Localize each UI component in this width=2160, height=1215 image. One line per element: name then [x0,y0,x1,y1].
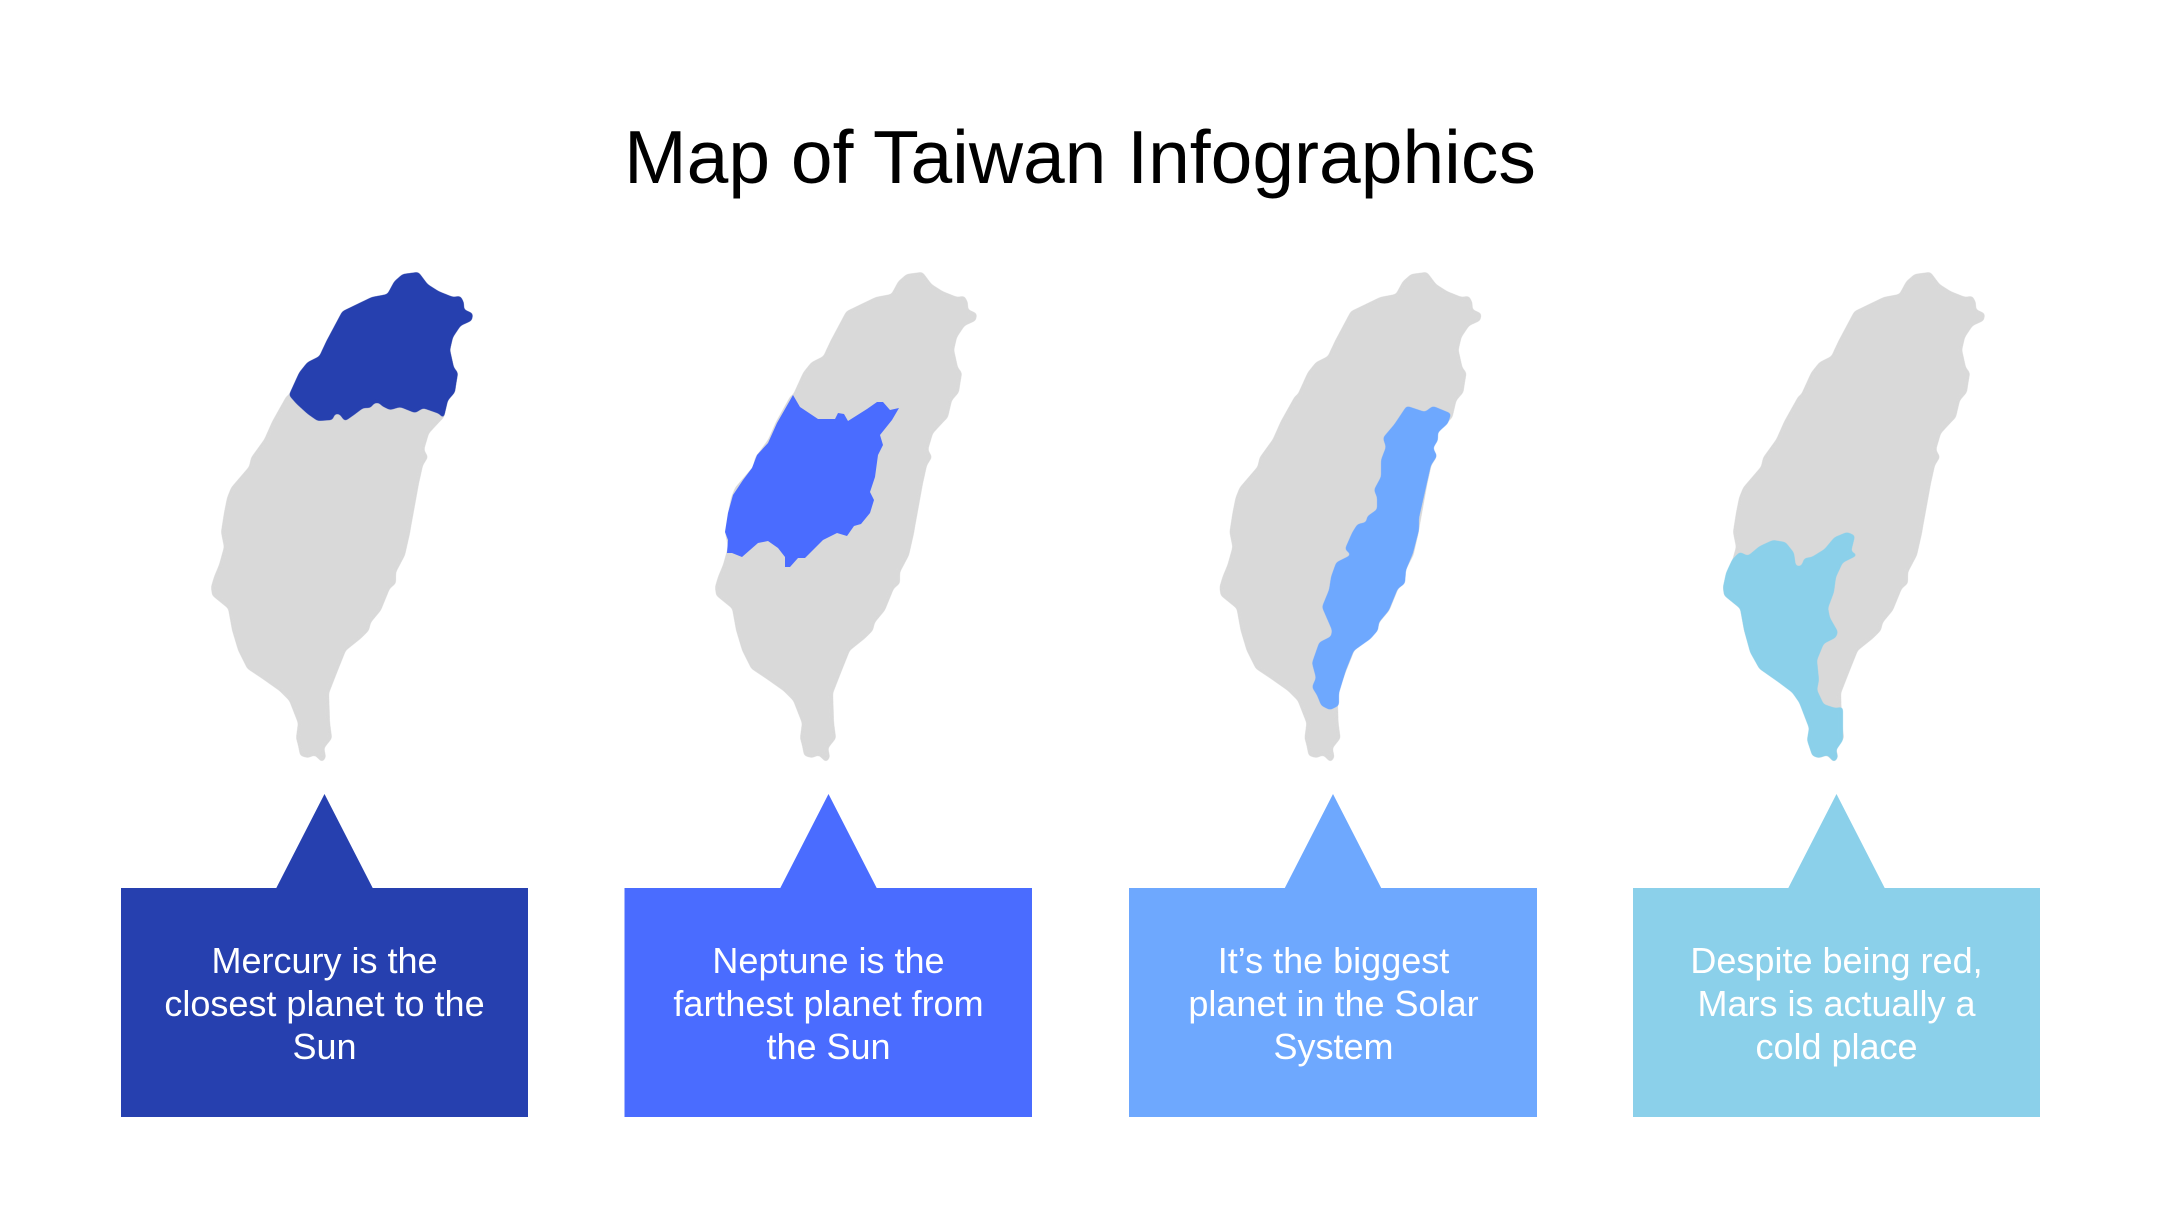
map: northern Taiwan highlighted [212,273,472,761]
callout: Neptune: the Sun [766,1026,891,1067]
callout: Mars: Mars is actually a [1697,983,1977,1024]
panel: Mars [1633,273,2040,1117]
callout: Jupiter: planet in the Solar [1188,983,1479,1024]
callout: Mars [1633,794,2040,1117]
callout: Neptune [624,794,1032,1117]
map: eastern Taiwan highlighted [1220,273,1480,761]
callout: Mercury: closest planet to the [164,983,485,1024]
map: western Taiwan highlighted [716,273,976,761]
callout: Mercury: Mercury is the [211,940,438,981]
map: southern Taiwan highlighted [1724,273,1984,761]
panel: Jupiter [1129,273,1537,1117]
callout: Jupiter [1129,794,1537,1117]
callout: Mars: cold place [1755,1026,1918,1067]
callout: Mercury: Sun [292,1026,357,1067]
callout: Neptune: farthest planet from [673,983,984,1024]
panel: Mercury [121,273,528,1117]
title: Map of Taiwan Infographics [624,115,1536,199]
callout: Jupiter: System [1273,1026,1394,1067]
callout: Jupiter: It’s the biggest [1218,940,1449,981]
callout: Mercury [121,794,528,1117]
callout: Mars: Despite being red, [1690,940,1983,981]
callout: Neptune: Neptune is the [712,940,945,981]
panel: Neptune [624,273,1032,1117]
